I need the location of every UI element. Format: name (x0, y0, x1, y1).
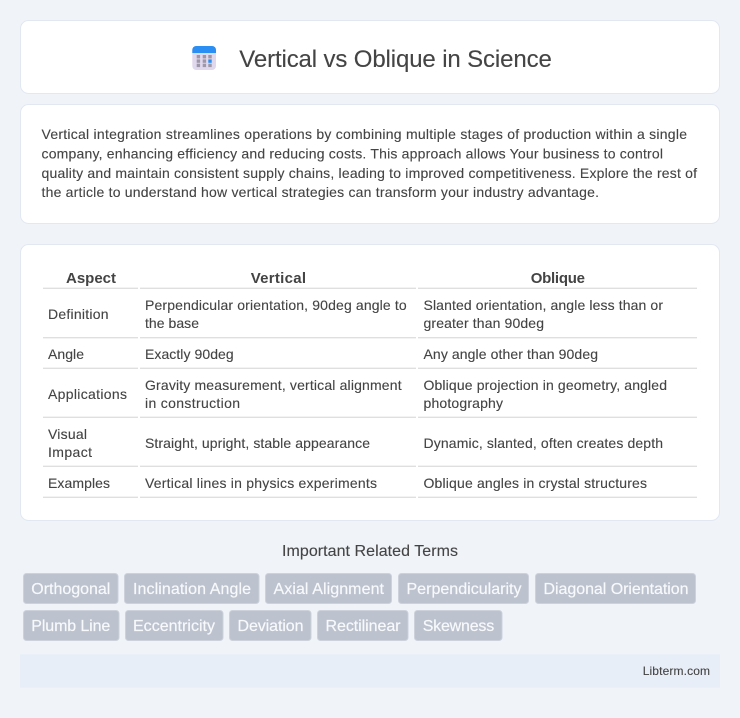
row: applications (43, 377, 697, 417)
tag: Eccentricity: Eccentricity (133, 618, 215, 635)
row: visual impact: Straight, upright, stable appearance (145, 435, 370, 451)
row: examples (43, 475, 697, 497)
intro text: quality and maintain consistent supply chains, leading to improved competitiveness. Explore the rest of (42, 165, 697, 181)
title: Vertical vs Oblique in Science (239, 46, 552, 73)
row: visual impact: Impact (48, 444, 92, 460)
row: examples: Vertical lines in physics experiments (145, 475, 377, 491)
row: angle: Exactly 90deg (145, 346, 234, 362)
tag: Diagonal Orientation: Diagonal Orientation (544, 581, 688, 598)
row: visual impact: Visual (48, 426, 87, 442)
tag: Diagonal Orientation (536, 574, 696, 604)
icon: calendar (192, 46, 216, 70)
tag: Eccentricity (126, 610, 223, 640)
tag: Inclination Angle (124, 574, 259, 604)
tag: Perpendicularity (398, 574, 528, 604)
tag: Deviation: Deviation (238, 618, 304, 635)
row: applications: in construction (145, 395, 240, 411)
row: visual impact: Dynamic, slanted, often creates depth (424, 435, 663, 451)
row: definition: Slanted orientation, angle less than or (424, 297, 663, 313)
row: definition: Definition (48, 306, 109, 322)
tag: Skewness (414, 610, 502, 640)
intro text: the article to understand how vertical strategies can transform your industry advantage. (42, 184, 599, 200)
table header: Aspect (66, 270, 116, 287)
row: applications: photography (424, 395, 503, 411)
tag: Skewness: Skewness (423, 618, 494, 635)
heading: related terms: Important Related Terms (282, 543, 458, 560)
table header (43, 270, 697, 288)
tag: Orthogonal: Orthogonal (31, 581, 110, 598)
footer: Libterm.com (643, 664, 710, 678)
panel: introduction (20, 104, 720, 224)
tag: Deviation (230, 610, 311, 640)
row: angle (43, 346, 697, 368)
footer (20, 654, 720, 688)
tag: Inclination Angle: Inclination Angle (133, 581, 251, 598)
table header: Vertical (251, 270, 306, 287)
row: examples: Oblique angles in crystal structures (424, 475, 647, 491)
intro text: Vertical integration streamlines operations by combining multiple stages of production within a single (42, 126, 687, 142)
row: definition (43, 297, 697, 338)
tag: Plumb Line: Plumb Line (31, 618, 110, 635)
panel: header (20, 20, 720, 94)
table header: Oblique (531, 270, 585, 287)
tag: Perpendicularity: Perpendicularity (406, 581, 522, 598)
tag: Orthogonal (24, 574, 118, 604)
row: definition: the base (145, 315, 199, 331)
related term tags (24, 574, 696, 640)
row: definition: Perpendicular orientation, 90deg angle to (145, 297, 407, 313)
tag: Axial Alignment (266, 574, 392, 604)
panel: comparison table (20, 244, 720, 520)
tag: Axial Alignment: Axial Alignment (274, 581, 385, 598)
row: angle: Angle (48, 346, 84, 362)
tag: Rectilinear: Rectilinear (326, 618, 401, 635)
tag: Rectilinear (318, 610, 408, 640)
intro text (42, 126, 697, 200)
row: examples: Examples (48, 475, 110, 491)
row: applications: Gravity measurement, vertical alignment (145, 377, 402, 393)
row: visual impact (43, 426, 697, 466)
row: applications: Applications (48, 386, 127, 402)
tag: Plumb Line (24, 610, 119, 640)
row: definition: greater than 90deg (424, 315, 544, 331)
intro text: company, enhancing efficiency and reducing costs. This approach allows Your business to control (42, 146, 663, 162)
row: applications: Oblique projection in geometry, angled (424, 377, 667, 393)
row: angle: Any angle other than 90deg (424, 346, 598, 362)
